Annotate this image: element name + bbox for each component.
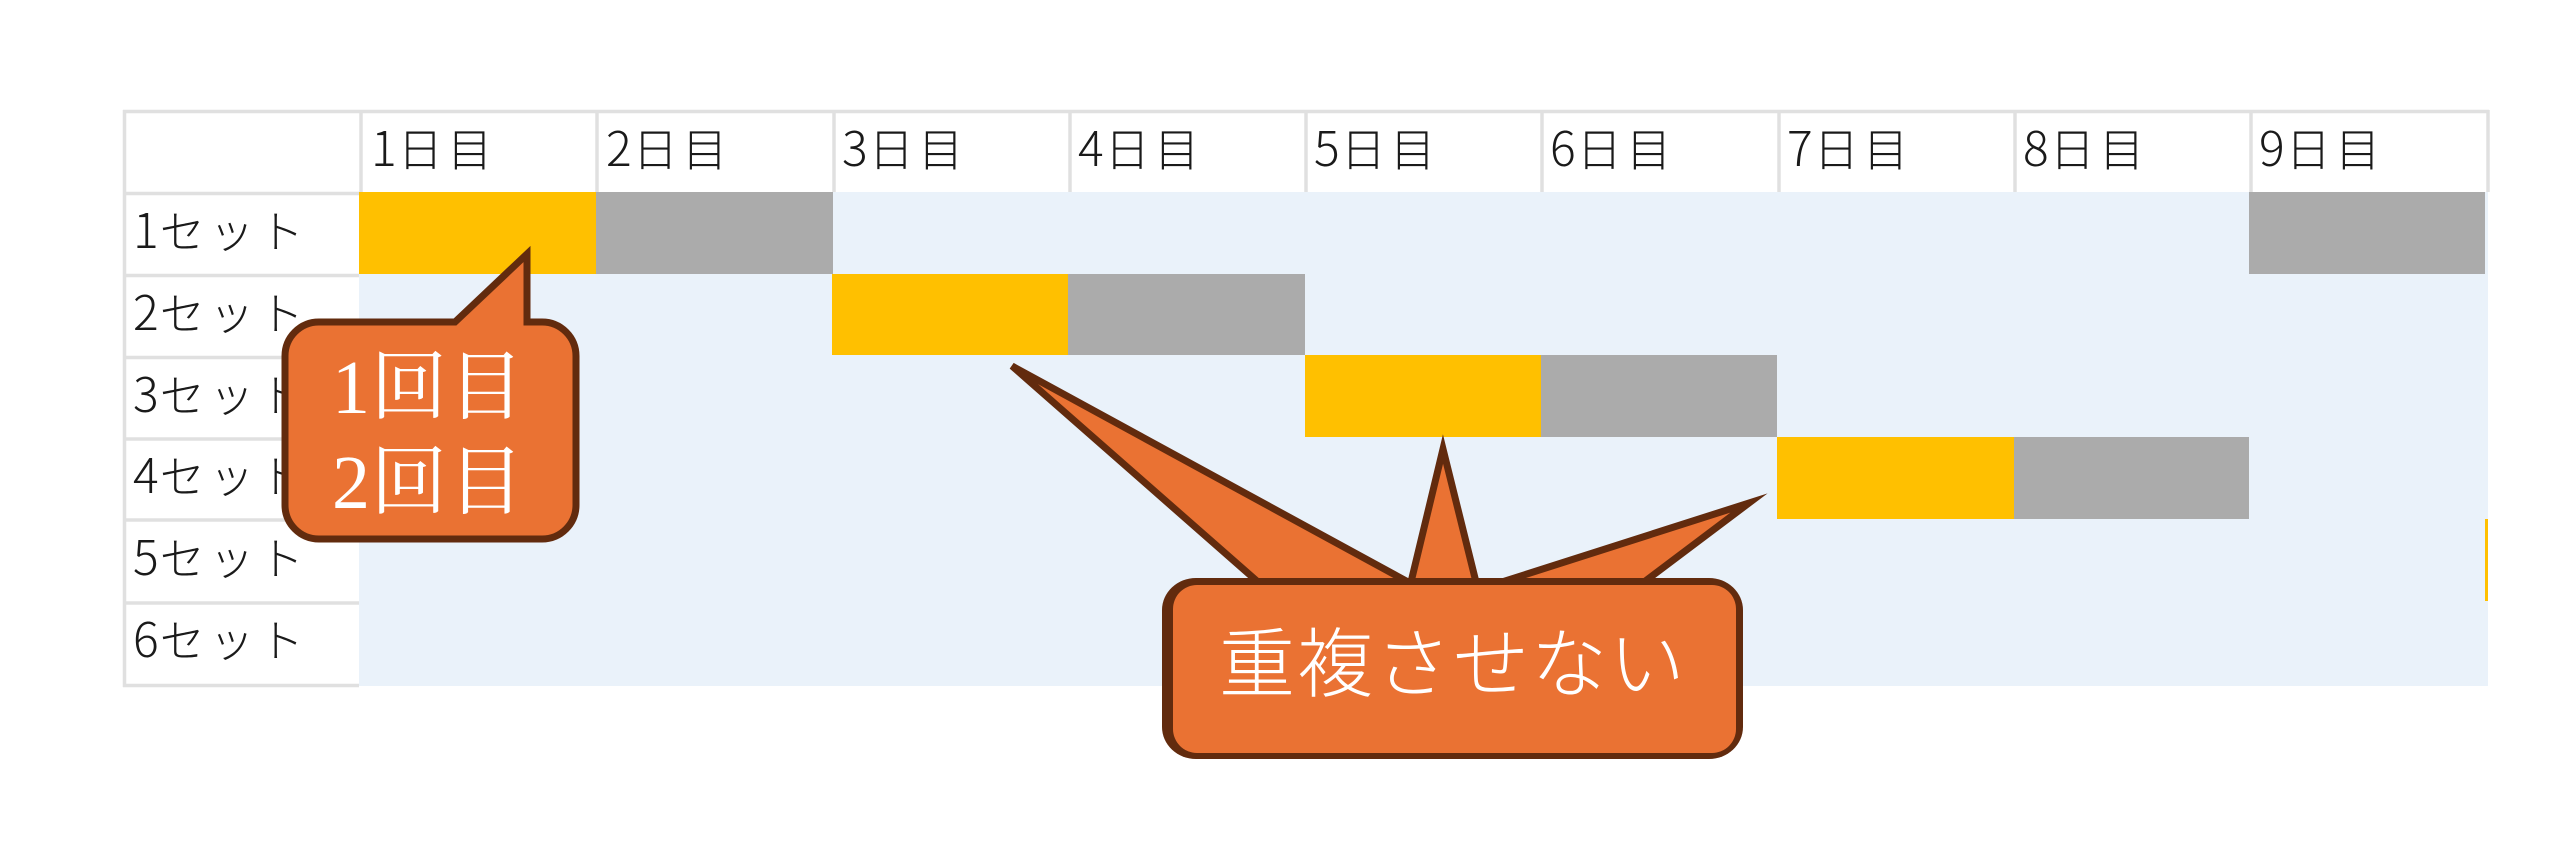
set labels xyxy=(133,192,308,671)
day headers: 5日目 xyxy=(1314,110,1440,180)
set labels: 6セット xyxy=(133,601,308,671)
callout text: 2回目 xyxy=(332,441,525,525)
day headers: 3日目 xyxy=(842,110,968,180)
pointer tails xyxy=(1012,366,1749,582)
day headers: 6日目 xyxy=(1550,110,1676,180)
callout: do not overlap xyxy=(1012,366,1749,759)
schedule table xyxy=(123,110,2489,687)
day headers: 9日目 xyxy=(2259,110,2385,180)
callout: 1st and 2nd time xyxy=(285,254,576,539)
day headers: 1日目 xyxy=(371,110,497,180)
callout text: 1回目 xyxy=(332,346,525,430)
set labels: 5セット xyxy=(133,519,308,589)
bars: set 5 sliver xyxy=(2485,519,2488,601)
day headers: 2日目 xyxy=(606,110,732,180)
set labels: 4セット xyxy=(133,437,308,507)
bars: set 2 xyxy=(832,274,1305,355)
bars: set 3 xyxy=(1305,355,1777,437)
day headers: 8日目 xyxy=(2023,110,2149,180)
grid lines xyxy=(123,110,2489,687)
day headers: 4日目 xyxy=(1078,110,1204,180)
day headers xyxy=(371,110,2385,180)
bars: set 4 xyxy=(1777,437,2249,519)
set labels: 3セット xyxy=(133,356,308,426)
set labels: 1セット xyxy=(133,192,308,262)
set labels: 2セット xyxy=(133,274,308,344)
callout text: 重複させない xyxy=(1219,623,1687,708)
callout text xyxy=(332,346,525,525)
day headers: 7日目 xyxy=(1787,110,1913,180)
bars: set 1 xyxy=(359,192,2485,274)
chart background xyxy=(359,192,2488,686)
callout box xyxy=(1162,578,1743,759)
